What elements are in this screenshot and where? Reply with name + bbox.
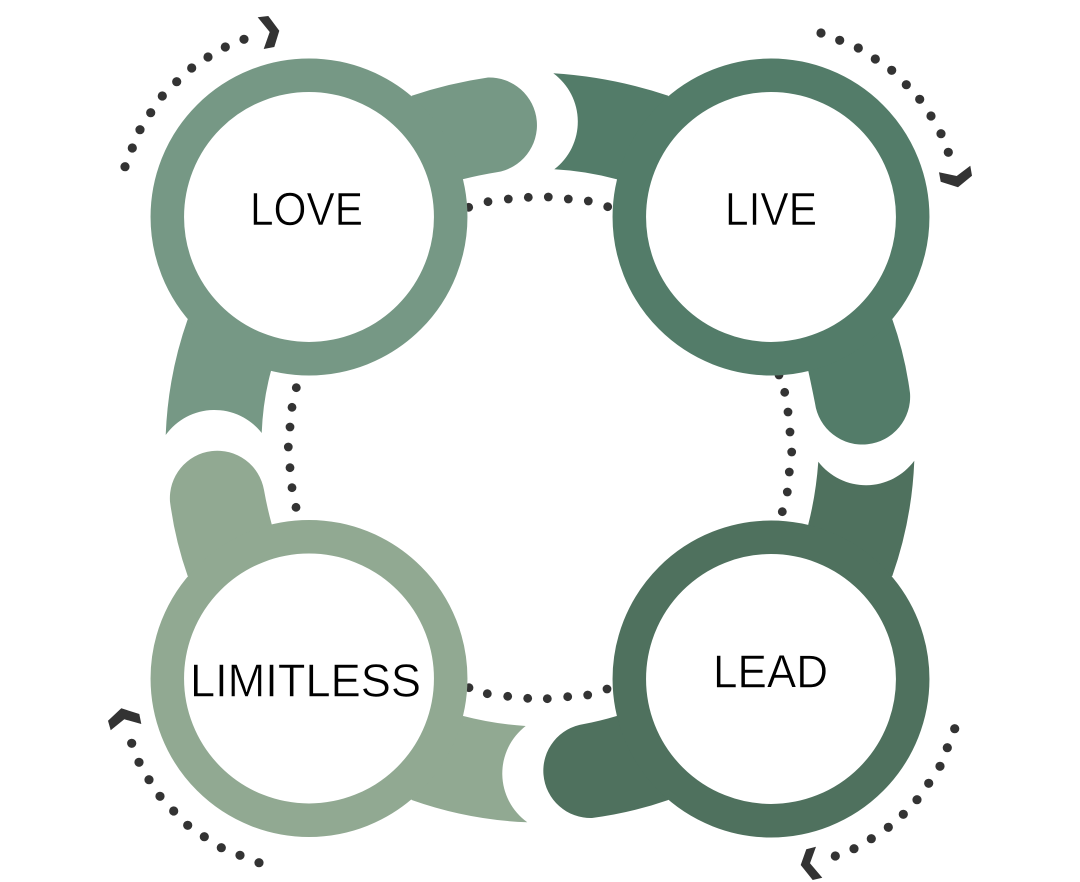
lead label: LEAD [713,646,828,698]
lead upper notched tail [800,461,914,620]
love ring [167,75,451,359]
live lower rounded tab [780,300,910,445]
node: LIMITLESS [167,451,527,822]
outer arrow: bottom left [108,708,264,867]
live left notched tail [553,73,680,220]
love right rounded tab [400,77,537,220]
live ring [629,75,913,359]
limitless label: LIMITLESS [190,655,421,707]
outer arrow: bottom right [801,724,959,880]
outer arrow: top right [816,28,972,187]
limitless upper rounded tab [170,451,300,600]
inner dotted connector: limitless to love [284,383,301,512]
love lower notched tail [166,300,300,435]
node: LOVE [166,75,537,435]
limitless right notched tail [380,716,527,822]
limitless ring [167,537,451,820]
inner dotted connector: live to lead [775,371,796,516]
lead ring [629,537,913,821]
node: LIVE [553,73,913,445]
inner dotted connector: love to live [464,193,612,212]
node: LEAD [543,461,914,821]
outer arrow: top left [120,16,279,171]
inner dotted connector: lead to limitless [465,683,611,703]
love label: LOVE [250,183,363,235]
live label: LIVE [725,183,817,235]
lead left rounded tab [543,716,700,818]
